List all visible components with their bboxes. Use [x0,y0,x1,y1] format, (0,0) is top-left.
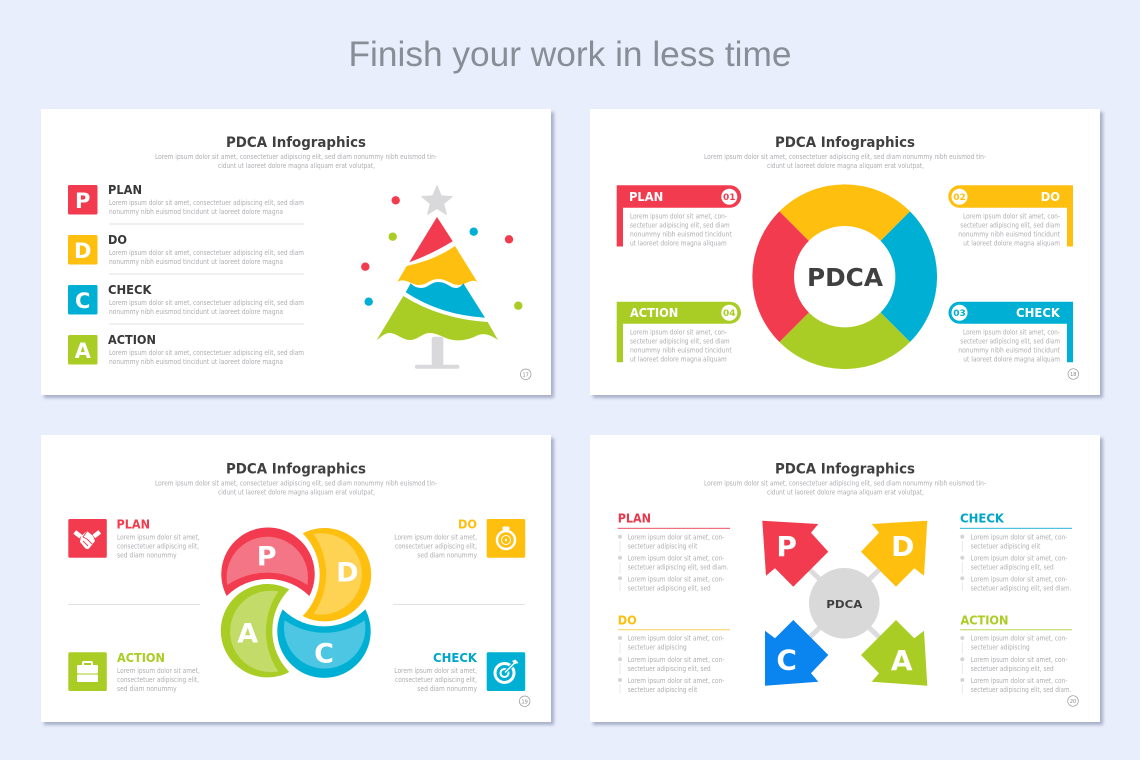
check list: Lorem ipsum dolor sit amet, con- [971,554,1068,562]
do list: Lorem ipsum dolor sit amet, con- [628,677,725,685]
icon: target [495,660,518,682]
action list: sectetuer adipiscing elit, sed [971,665,1054,673]
page number: 17 [523,372,529,378]
action card: ACTION [630,306,678,320]
page number: 19 [522,699,528,705]
intro text: Lorem ipsum dolor sit amet, consectetuer adipiscing elit, sed diam nonummy nibh euismod tin- [155,153,438,161]
plan list: PLAN [618,512,651,526]
action block: sed diam nonummy [117,685,177,693]
page number [1068,369,1079,379]
plan block [68,518,200,560]
action list: Lorem ipsum dolor sit amet, con- [971,635,1068,643]
check card: nonummy nibh euismod tincidunt [958,347,1060,355]
action block: Lorem ipsum dolor sit amet, [117,667,200,675]
action block: consectetuer adipiscing elit, [117,676,199,684]
intro text [704,153,987,170]
do card: ut laoreet dolore magna aliquam [963,240,1060,248]
page number [520,369,531,380]
action row [68,333,304,366]
panel: PDCA donut [590,109,1100,395]
intro text: cidunt ut laoreet dolore magna aliquam erat volutpat, [218,488,375,496]
action block [68,651,200,693]
intro text [155,480,438,496]
action card [617,302,741,364]
do block: consectetuer adipiscing elit, [395,543,477,551]
intro text: Lorem ipsum dolor sit amet, consectetuer adipiscing elit, sed diam nonummy nibh euismod tin- [704,480,987,488]
heading: PDCA Infographics [226,462,366,478]
donut chart: PDCA [807,263,884,292]
plan block: PLAN [116,518,150,532]
arrow diagram: C [776,644,797,676]
page number: 18 [1070,372,1076,378]
intro text [704,480,987,496]
action list: Lorem ipsum dolor sit amet, con- [971,677,1068,685]
plan list: sectetuer adipiscing elit, sed diam. [628,563,728,571]
check block: consectetuer adipiscing elit, [395,676,477,684]
plan list: Lorem ipsum dolor sit amet, con- [628,575,725,583]
action block: ACTION [117,651,165,665]
intro text: Lorem ipsum dolor sit amet, consectetuer adipiscing elit, sed diam nonummy nibh euismod tin- [155,480,438,488]
title: Finish your work in less time [348,35,792,74]
action row: Lorem ipsum dolor sit amet, consectetuer adipiscing elit, sed diam [109,349,304,357]
check list: Lorem ipsum dolor sit amet, con- [971,533,1068,541]
plan card: nonummy nibh euismod tincidunt [630,231,732,239]
plan row: P [75,189,90,213]
action list: sectetuer adipiscing [971,644,1030,652]
plan list: Lorem ipsum dolor sit amet, con- [628,554,725,562]
icon: handshake [73,530,101,549]
do row: nonummy nibh euismod tincidunt ut laoreet dolore magna [109,258,283,266]
plan card: ut laoreet dolore magna aliquam [630,240,727,248]
do block: DO [458,518,477,532]
plan row [68,183,304,216]
arrow diagram: A [891,644,913,677]
check list [960,512,1072,592]
tree illustration [361,186,522,369]
check card [948,302,1073,364]
icon: briefcase [77,661,98,682]
action card: nonummy nibh euismod tincidunt [630,347,732,355]
plan list: sectetuer adipiscing elit [628,542,698,550]
heading: PDCA Infographics [226,135,366,151]
petal diagram: P [257,542,277,572]
heading: PDCA Infographics [775,462,915,478]
do card: DO [1041,190,1060,204]
check card: ut laoreet dolore magna aliquam [963,356,1060,364]
do row: Lorem ipsum dolor sit amet, consectetuer adipiscing elit, sed diam [109,249,304,257]
page number [519,696,530,707]
action list: ACTION [960,613,1008,627]
plan block: consectetuer adipiscing elit, [117,543,199,551]
plan block: sed diam nonummy [117,552,177,560]
plan list: Lorem ipsum dolor sit amet, con- [628,533,725,541]
petal diagram: D [336,558,359,588]
plan list: sectetuer adipiscing elit, sed [628,584,711,592]
action card: 04 [723,309,736,319]
check row [68,283,304,316]
do card [948,185,1073,248]
check row: nonummy nibh euismod tincidunt ut laoreet dolore magna [109,308,283,316]
action row: ACTION [108,333,156,347]
check block: Lorem ipsum dolor sit amet, [394,667,477,675]
check card: Lorem ipsum dolor sit amet, con- [963,329,1061,337]
intro text: cidunt ut laoreet dolore magna aliquam erat volutpat, [767,488,924,496]
do row: DO [108,233,127,247]
donut chart [752,184,937,369]
intro text: Lorem ipsum dolor sit amet, consectetuer adipiscing elit, sed diam nonummy nibh euismod tin- [704,153,987,161]
plan list [618,512,730,592]
heading: PDCA Infographics [775,135,915,151]
check row: CHECK [108,283,152,297]
do card: nonummy nibh euismod tincidunt [958,231,1060,239]
do block [394,518,525,560]
do list: sectetuer adipiscing elit, sed [628,665,711,673]
icon: stopwatch [497,526,515,549]
do list [618,613,730,694]
action card: ut laoreet dolore magna aliquam [630,356,727,364]
panel: PDCA list with tree [41,109,551,395]
arrow diagram [762,521,927,686]
plan row: PLAN [108,183,142,197]
do list: Lorem ipsum dolor sit amet, con- [628,656,725,664]
check list: sectetuer adipiscing elit, sed [971,563,1054,571]
check card: CHECK [1016,306,1061,320]
check block: CHECK [433,651,478,665]
do list: sectetuer adipiscing [628,644,687,652]
do list: DO [618,613,637,627]
check list: Lorem ipsum dolor sit amet, con- [971,575,1068,583]
arrow diagram: D [891,530,914,563]
petal diagram [221,528,371,678]
check block: sed diam nonummy [417,685,477,693]
check card: sectetuer adipiscing elit, sed diam [960,338,1060,346]
do card: sectetuer adipiscing elit, sed diam [960,222,1060,230]
plan row: nonummy nibh euismod tincidunt ut laoreet dolore magna [109,208,283,216]
do list: sectetuer adipiscing elit [628,686,698,694]
intro text: cidunt ut laoreet dolore magna aliquam erat volutpat, [218,162,375,170]
arrow diagram: P [776,530,797,563]
petal diagram: C [314,638,334,670]
plan card: sectetuer adipiscing elit, sed diam [630,222,730,230]
panel: PDCA petals with icons [41,435,551,722]
do list: Lorem ipsum dolor sit amet, con- [628,635,725,643]
do row [68,233,304,266]
check row: Lorem ipsum dolor sit amet, consectetuer adipiscing elit, sed diam [109,299,304,307]
do card: 02 [953,193,966,203]
action card: sectetuer adipiscing elit, sed diam [630,338,730,346]
page number [1068,696,1078,706]
plan card: Lorem ipsum dolor sit amet, con- [630,213,728,221]
plan card: 01 [723,193,736,203]
petal diagram: A [237,618,258,650]
action row: nonummy nibh euismod tincidunt ut laoreet dolore magna [109,358,283,366]
intro text [155,153,438,170]
check list: sectetuer adipiscing elit, sed diam. [971,584,1071,592]
check list: CHECK [960,512,1005,526]
intro text: cidunt ut laoreet dolore magna aliquam erat volutpat, [767,162,924,170]
do card: Lorem ipsum dolor sit amet, con- [963,213,1061,221]
do row: D [74,239,91,263]
action list: Lorem ipsum dolor sit amet, con- [971,656,1068,664]
action list: sectetuer adipiscing elit, sed diam. [971,686,1071,694]
plan row: Lorem ipsum dolor sit amet, consectetuer adipiscing elit, sed diam [109,199,304,207]
plan card [617,185,741,248]
plan block: Lorem ipsum dolor sit amet, [117,534,200,542]
do block: sed diam nonummy [417,552,477,560]
action card: Lorem ipsum dolor sit amet, con- [630,329,728,337]
action list [960,613,1072,694]
plan card: PLAN [629,190,663,204]
check row: C [75,289,90,313]
arrow diagram: PDCA [826,598,863,611]
panel: PDCA arrows [590,435,1100,722]
do block: Lorem ipsum dolor sit amet, [394,534,477,542]
check card: 03 [953,309,966,319]
page number: 20 [1070,699,1076,705]
action row: A [75,339,92,363]
check block [394,651,525,693]
check list: sectetuer adipiscing elit [971,542,1041,550]
